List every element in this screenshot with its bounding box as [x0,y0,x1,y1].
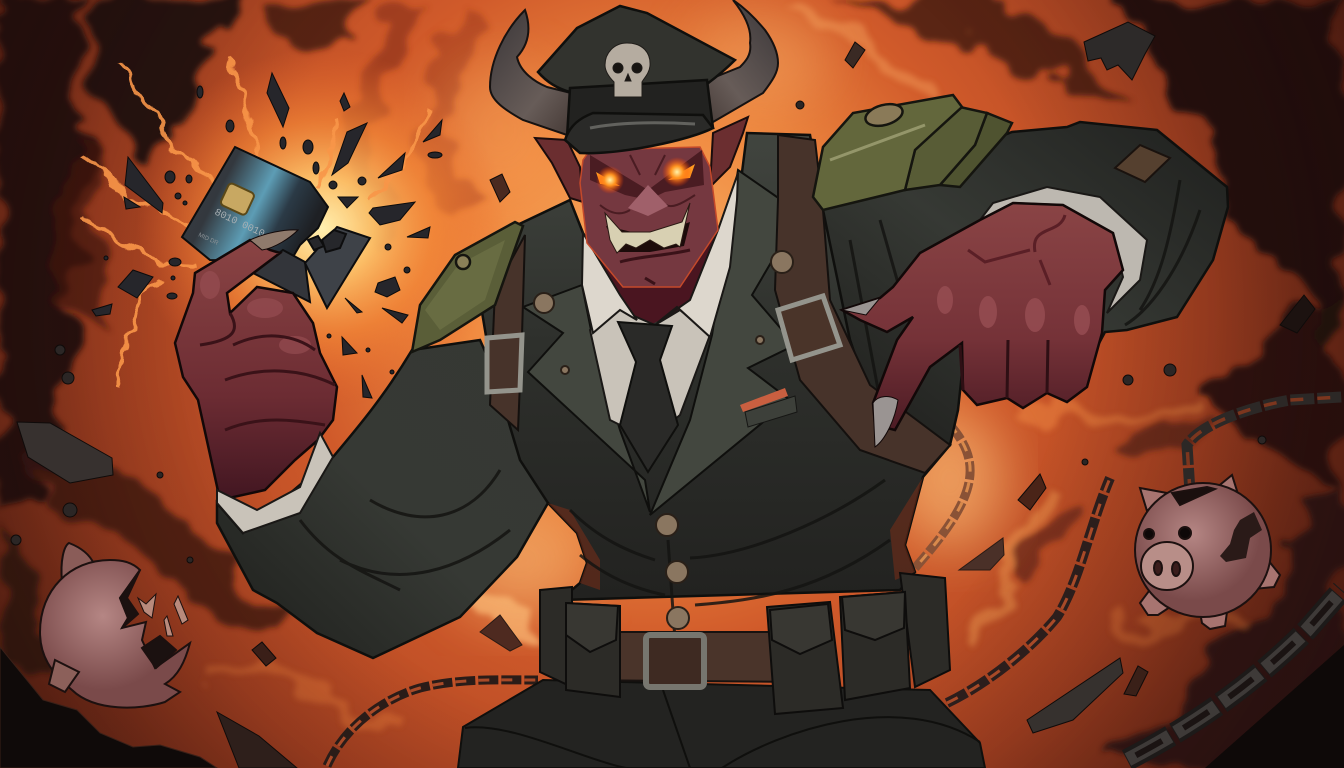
glowing eyes [596,157,695,194]
pig: dark hollow [120,570,176,668]
pig: snout stub [49,660,79,692]
rank tabs [1115,145,1170,182]
nose [628,185,668,216]
pig: snout [1141,542,1193,590]
chin [620,250,690,284]
card: printed number: 8010 0010 [212,208,266,240]
coat: right sleeve [815,122,1228,445]
coat: warm rim shading [548,477,923,590]
chain: bottom right heavy links [1127,590,1342,760]
claws [842,298,898,447]
face [580,147,718,287]
cuff: left sleeve [217,433,333,533]
tie [618,322,678,472]
pig: eyes [1144,529,1154,539]
epaulette: right [813,95,1012,210]
cap: crown [538,6,735,92]
pig: shell fragments [138,594,188,636]
neck [590,230,720,325]
hand outline [842,203,1123,430]
card: chip [220,182,255,216]
veins [968,215,1065,285]
brow shadow [590,150,704,200]
piggy bank: right [1135,475,1280,629]
leather strap: left shoulder [487,235,525,430]
chain: to right piggy bank [1187,397,1342,492]
card: broken lower piece [253,250,310,302]
hand outline [175,240,337,500]
pig: ear [61,543,94,582]
knuckles [937,286,1090,335]
dark corner lower right [1205,645,1344,768]
rubble: slab, lower right [1027,658,1123,733]
card: printed name: MID DR [197,232,220,247]
cheek creases [600,155,695,213]
finger creases [200,313,335,430]
officer cap [538,6,735,153]
knuckle highlights [200,271,311,354]
mouth and fangs [605,203,690,253]
chains in the background [327,397,1342,766]
credit card shattering [182,147,370,308]
rubble: broken plate, left [17,422,113,483]
figure: demon officer [217,0,1228,768]
chain: behind figure [915,425,970,568]
rubble: broken plate, top right [1084,22,1155,80]
pig: slot [1172,487,1215,505]
coat: skirt folds [465,690,980,768]
lightning and blast glow behind the card [82,48,507,408]
cap: visor [565,113,713,153]
skull badge [605,43,650,97]
lapels [523,170,800,515]
chain: lower left [327,680,538,766]
shirt cuff: right [980,187,1147,313]
left hand gripping the card [175,230,337,500]
claw [250,230,298,250]
piggy bank: left, cracked [40,543,190,708]
collar [582,173,738,337]
chain: lower right [947,478,1110,703]
coat: near arm [217,340,548,658]
coat buttons [534,251,793,629]
coat: torso [480,133,950,600]
cap: band [567,80,713,137]
pouches [540,573,950,714]
rocky ground corner [0,647,217,768]
ears [535,117,748,202]
demon head [535,117,748,287]
pig: ears and legs [1140,475,1280,629]
finger separators [960,340,1048,398]
pig: body [1135,483,1271,617]
horns [490,0,778,135]
pig: shell [40,560,190,708]
pocket square [740,388,797,427]
card: broken right piece [305,227,370,308]
right hand, pointing down [842,203,1123,447]
leather strap: right shoulder [775,135,950,473]
shirt [590,310,710,440]
coat: folds [300,180,1200,640]
pig: crack [1220,512,1262,562]
coat: lower skirt [458,680,985,768]
card: main piece [182,147,328,262]
epaulette: left [412,222,523,352]
card shards [92,73,442,398]
belt [540,573,950,714]
